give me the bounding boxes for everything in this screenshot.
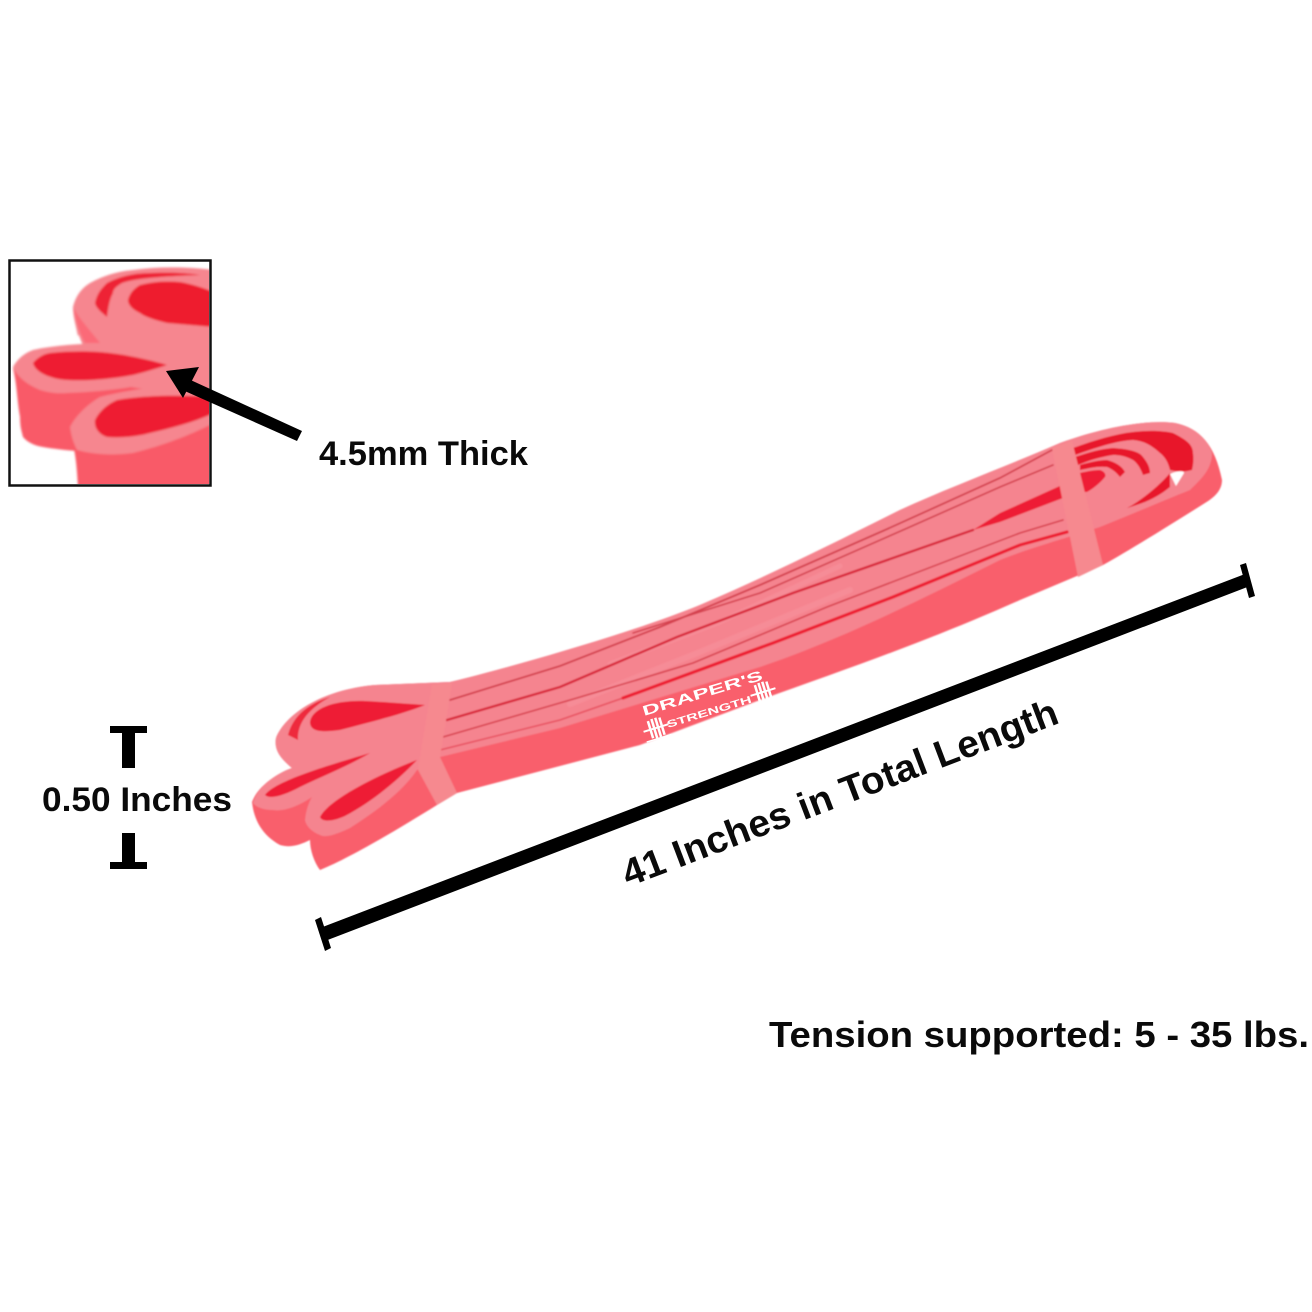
- resistance band: [252, 422, 1222, 870]
- brand logo: [640, 667, 779, 743]
- left strap: [418, 683, 457, 805]
- inset panel: thickness close-up: [10, 260, 214, 488]
- inset middle loop inner: [33, 351, 167, 380]
- middle left loop inner: [265, 753, 370, 797]
- left barbell icon: [641, 715, 672, 743]
- lighter strand highlights: [570, 566, 850, 704]
- length marker line: [315, 563, 1255, 951]
- front left loop inner: [320, 760, 417, 821]
- right end third arc: [1080, 460, 1125, 477]
- inset front loop rim: [70, 383, 214, 454]
- inset front loop inner: [95, 396, 214, 437]
- label: tension: Tension supported: 5 - 35 lbs.: [769, 1014, 1309, 1055]
- inset middle loop side: [13, 368, 150, 451]
- upper left loop inner: [310, 701, 425, 731]
- right end outer hole: [1073, 431, 1193, 472]
- right end centre hole: [1080, 470, 1105, 492]
- arrow: thickness pointer: [166, 367, 302, 441]
- right strap: [1052, 441, 1103, 577]
- band side face: [252, 422, 1222, 870]
- label: thickness: 4.5mm Thick: [319, 435, 528, 473]
- inset middle loop rim: [12, 342, 129, 394]
- inset top loop inner: [128, 281, 214, 327]
- right end white gap: [1170, 471, 1184, 486]
- inset top loop side shade: [74, 310, 99, 344]
- label: width: 0.50 Inches: [42, 781, 232, 819]
- label: length: 41 Inches in Total Length: [616, 692, 1064, 895]
- brand name: DRAPER'S: [640, 667, 764, 719]
- band top face: [253, 422, 1212, 836]
- width marker: bottom bracket: [110, 833, 147, 869]
- inset top loop: [73, 267, 214, 350]
- brand subtitle: STRENGTH: [666, 695, 753, 731]
- right end lower wedge: [1127, 473, 1170, 508]
- inset front loop side: [73, 424, 209, 484]
- width marker: top bracket: [110, 726, 147, 768]
- inset top loop sliver: [95, 273, 200, 317]
- upper left loop back sliver: [288, 697, 330, 740]
- long inner wedge: [973, 485, 1063, 530]
- right barbell icon: [748, 679, 779, 707]
- strand separation lines: [440, 450, 1067, 750]
- inset frame: [10, 260, 210, 486]
- right end second arc: [1075, 448, 1150, 475]
- inset backing: [132, 348, 209, 390]
